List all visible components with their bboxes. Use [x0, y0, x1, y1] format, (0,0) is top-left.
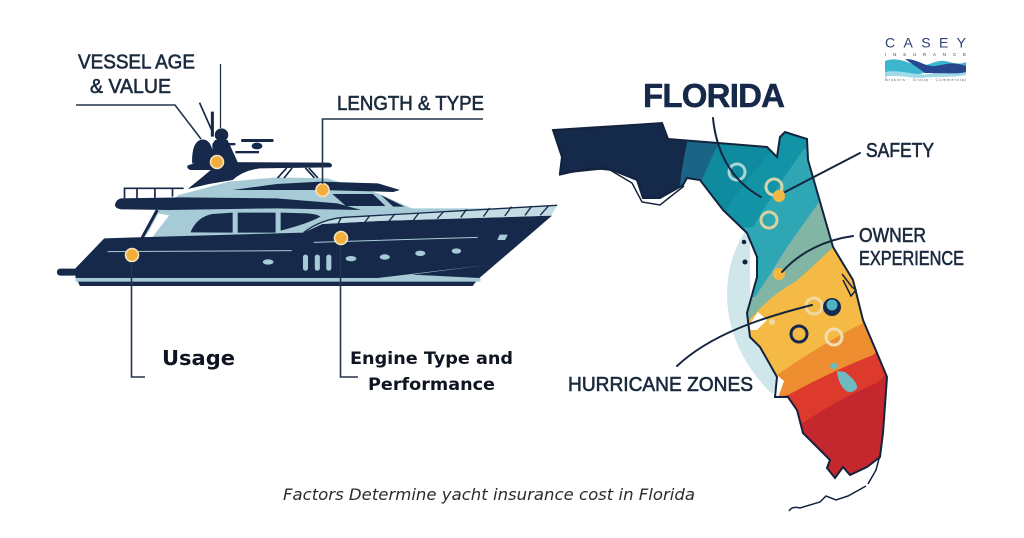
- yacht: windscreen struts: [278, 168, 318, 178]
- map: storm teardrop: [830, 363, 857, 392]
- Florida heading: FLORIDA: [643, 77, 785, 114]
- yacht: aft railing: [124, 188, 184, 198]
- label: safety: SAFETY: [866, 140, 934, 162]
- yacht: hull: [75, 216, 552, 278]
- map: Lake Okeechobee accent: [769, 319, 775, 325]
- yacht: upper deck band: [115, 197, 361, 210]
- label: usage: Usage: [162, 346, 235, 370]
- map: yellow markers: [773, 190, 785, 280]
- yacht: front windows: [332, 194, 404, 207]
- yacht: stern step: [57, 269, 81, 276]
- logo: waves: [885, 59, 966, 78]
- yacht: white aft cut-out: [145, 213, 169, 237]
- yacht: roof hatch: [233, 182, 400, 192]
- caption: Factors Determine yacht insurance cost in Florida: [283, 485, 695, 504]
- label: owner experience, second line: EXPERIENCE: [859, 248, 964, 270]
- yacht: light superstructure: [145, 177, 550, 238]
- logo: subtitle: INSURANCE: [885, 52, 966, 57]
- logo: wordmark: CASEY: [885, 34, 967, 50]
- map: city rings: [729, 164, 842, 345]
- label: engine type and performance: Engine Type and: [350, 349, 513, 369]
- yacht: antennas: [200, 103, 212, 137]
- map: Charlotte Harbor: [776, 375, 784, 396]
- Florida map with risk gradient bands: [552, 122, 888, 480]
- map: dark marker: [823, 298, 841, 316]
- logo: tagline: Brokers · Group · Commercial: [885, 77, 966, 82]
- yacht: bow rail posts: [304, 205, 557, 233]
- yacht: radar domes and mast: [192, 128, 274, 166]
- yacht: waterline stripe: [75, 278, 480, 282]
- yacht: keel: [78, 282, 476, 286]
- label: hurricane zones: HURRICANE ZONES: [568, 374, 753, 396]
- map: Tampa Bay: [750, 312, 767, 330]
- yacht: marker dots: [126, 156, 348, 262]
- hurricane halo on gulf coast: [727, 225, 780, 394]
- leader lines for yacht labels: [76, 64, 483, 377]
- yacht: portholes and vents: [263, 235, 508, 271]
- yacht: bow rail strip: [304, 206, 557, 233]
- yacht: aft pillar: [142, 210, 157, 238]
- leader lines for Florida labels: [677, 118, 860, 366]
- label: vessel age and value, second line: & VALUE: [90, 76, 171, 98]
- yacht: flybridge: [187, 162, 332, 189]
- label: length and type: LENGTH & TYPE: [337, 93, 484, 115]
- label: engine type and performance, second line: Performance: [368, 375, 495, 395]
- map: state outline: [553, 123, 887, 478]
- map: barrier islands and keys: [559, 168, 880, 511]
- label: owner experience: OWNER: [859, 225, 926, 247]
- logo: Casey Insurance: [885, 34, 967, 82]
- label: vessel age and value: VESSEL AGE: [78, 52, 195, 74]
- yacht illustration: [57, 103, 557, 286]
- yacht: cabin windows: [190, 213, 321, 233]
- yacht: hull highlight lines: [108, 237, 478, 252]
- yacht: bow wave highlight: [378, 265, 490, 278]
